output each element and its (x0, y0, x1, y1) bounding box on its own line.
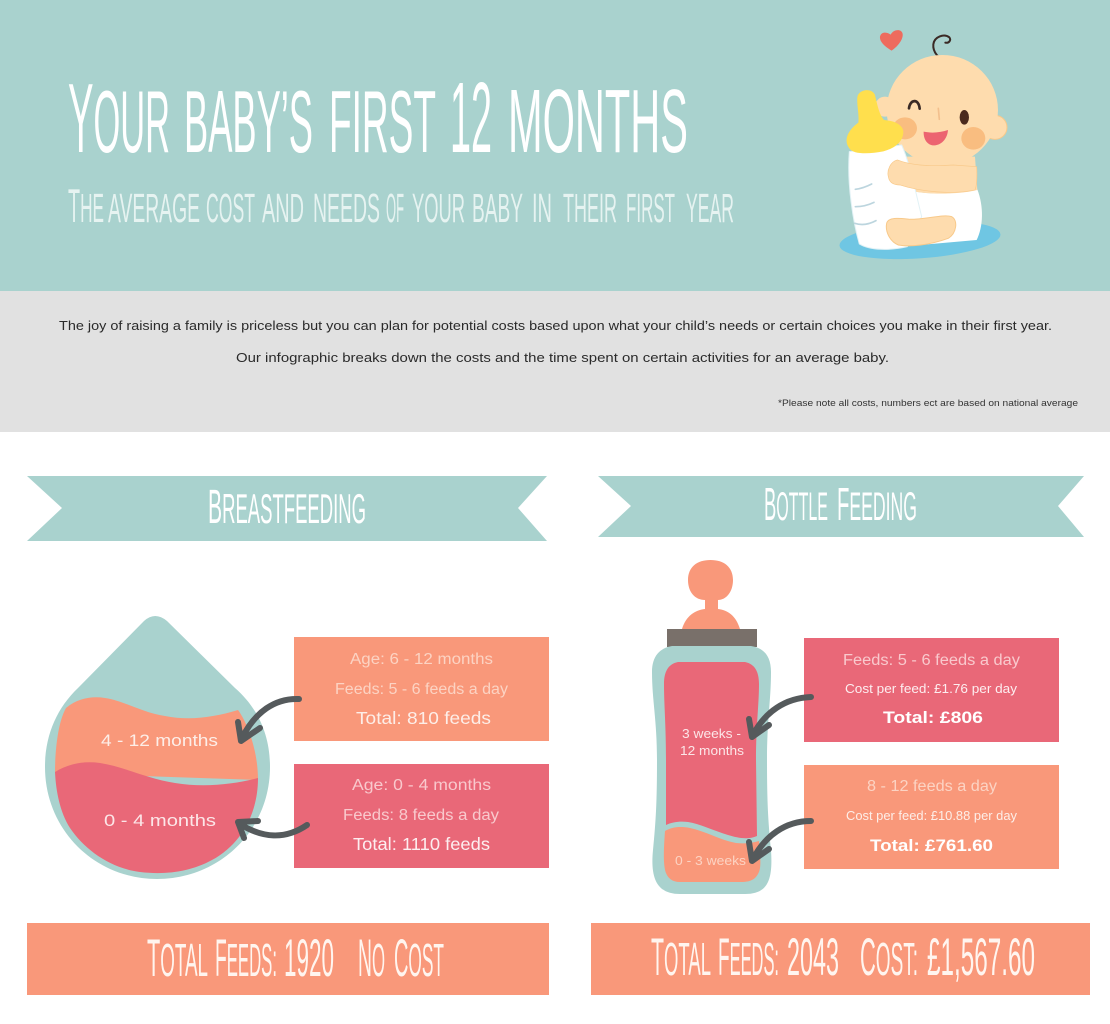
icon: head (887, 55, 998, 165)
total text: breastfeeding: TOTAL (147, 929, 208, 988)
subtitle: IN (532, 185, 552, 231)
intro text: The joy of raising a family is priceless but you can plan for potential costs based upon what your child’s needs or certain choices you make in their first year. (59, 318, 1052, 333)
title (68, 62, 688, 174)
header banner (0, 0, 1110, 291)
ribbon: breastfeeding (27, 476, 547, 541)
title: YOUR (68, 63, 170, 173)
panel: bottle 3 weeks - 12 months: Cost per feed: £1.76 per day (845, 681, 1018, 696)
subtitle: AVERAGE (108, 185, 200, 231)
arrow: bottle top (749, 697, 811, 737)
label: 4 - 12 months: 4 - 12 months (101, 731, 218, 750)
subtitle: BABY (472, 185, 523, 231)
icon: torso (903, 157, 977, 194)
ribbon: bottle feeding (598, 476, 1084, 537)
subtitle: FIRST (626, 185, 675, 231)
header banner: MONTHS (508, 72, 688, 172)
label: 0 - 4 months: 0 - 4 months (104, 811, 216, 830)
title: 12 (450, 62, 492, 174)
total text: breastfeeding: NO (358, 929, 385, 988)
icon: cheeks (893, 117, 917, 139)
panel: bottle 3 weeks - 12 months: Total: £806 (883, 708, 983, 727)
icon: leg (886, 216, 956, 246)
icon: arm (888, 160, 977, 192)
segment: 4 - 12 months (55, 697, 258, 780)
arrow: bottle bottom (749, 821, 811, 861)
subtitle (68, 179, 734, 232)
icon: baby hugging bottle (838, 30, 1007, 264)
subtitle: THE (68, 179, 104, 232)
panel: breastfeeding 6-12 months: Total: 810 feeds (356, 708, 491, 728)
bottle body (652, 646, 771, 894)
subtitle: AND (262, 185, 304, 231)
subtitle: THEIR (563, 185, 617, 231)
panel: bottle 0 - 3 weeks (804, 765, 1059, 869)
subtitle: COST (206, 185, 255, 231)
icon: bottle marks (855, 184, 876, 225)
icon: hair curl (933, 36, 950, 61)
label: 3 weeks - 12 months: 3 weeks - (682, 726, 741, 741)
arrow: 6-12 months (238, 699, 299, 741)
panel: bottle 3 weeks - 12 months (804, 638, 1059, 742)
panel: breastfeeding 0-4 months: Feeds: 8 feeds a day (343, 807, 499, 824)
segment: 0 - 4 months (55, 762, 258, 873)
segment: 3 weeks - 12 months (664, 662, 759, 838)
footnote: *Please note all costs, numbers ect are based on national average (778, 398, 1078, 409)
total text: bottle feeding: TOTAL (651, 928, 711, 987)
arrow: 0-4 months (238, 821, 307, 838)
subtitle: YOUR (412, 185, 465, 231)
label: 0 - 3 weeks: 0 - 3 weeks (675, 853, 747, 868)
panel: breastfeeding 6-12 months: Feeds: 5 - 6 feeds a day (335, 681, 508, 698)
total text: bottle feeding: 2043 (787, 928, 839, 987)
chart: baby bottle (652, 560, 771, 894)
panel: breastfeeding 0-4 months: Total: 1110 feeds (353, 834, 490, 854)
intro text 2: Our infographic breaks down the costs and the time spent on certain activities for an average baby. (236, 350, 889, 365)
icon: diaper (915, 189, 982, 245)
intro panel (0, 291, 1110, 432)
total bar: breastfeeding: COST (394, 929, 444, 988)
subtitle: OF (386, 185, 404, 231)
header banner: YEAR (686, 185, 734, 231)
title: FIRST (329, 72, 436, 171)
total text: breastfeeding (147, 929, 444, 988)
subtitle: NEEDS (313, 185, 380, 231)
total bar: breastfeeding (27, 923, 549, 995)
panel: bottle 0 - 3 weeks: Cost per feed: £10.88 per day (846, 808, 1017, 823)
total text: breastfeeding: 1920 (284, 929, 334, 988)
total text: bottle feeding: COST: (860, 928, 918, 987)
total bar: bottle feeding (591, 923, 1090, 995)
total text: bottle feeding: FEEDS: (718, 928, 779, 987)
ribbon: breastfeeding: BREASTFEEDING (208, 481, 366, 534)
icon: blue mat (838, 216, 1002, 264)
title: BABY’S (184, 72, 313, 171)
panel: breastfeeding 0-4 months: Age: 0 - 4 months (352, 777, 491, 794)
icon: bottle (849, 145, 922, 249)
panel: bottle 0 - 3 weeks: Total: £761.60 (870, 836, 993, 855)
panel: breastfeeding 6-12 months: Age: 6 - 12 months (350, 651, 493, 668)
segment: 0 - 3 weeks (664, 827, 760, 882)
total text: bottle feeding (651, 928, 1035, 987)
bottle teat (682, 560, 740, 629)
chart: baby bottle: 12 months (680, 743, 745, 758)
panel: breastfeeding 0-4 months (294, 764, 549, 868)
icon: bottle cap (847, 90, 903, 153)
total text: breastfeeding: FEEDS: (215, 929, 277, 988)
ribbon: bottle feeding: FEEDING (837, 478, 917, 530)
icon: face (909, 101, 920, 109)
bottle collar (667, 629, 757, 647)
panel: breastfeeding 6-12 months (294, 637, 549, 741)
chart: milk drop (45, 616, 270, 879)
heading: bottle feeding: BOTTLE (764, 478, 828, 530)
icon: ears (983, 115, 1007, 139)
icon: heart (880, 30, 903, 51)
panel: bottle 3 weeks - 12 months: Feeds: 5 - 6 feeds a day (843, 652, 1020, 669)
panel: bottle 0 - 3 weeks: 8 - 12 feeds a day (867, 778, 997, 795)
